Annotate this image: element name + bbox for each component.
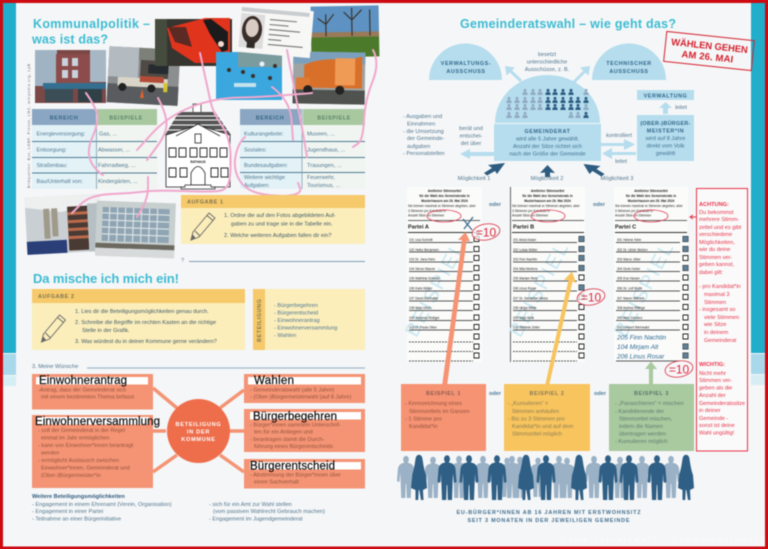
table: right areas: BEREICH bbox=[256, 116, 284, 122]
box: Einwohnerversammlung: - kann von Einwohner*innen beantragt bbox=[38, 443, 134, 449]
box: Beispiel 2: Kandidat*in und auf dem bbox=[512, 424, 574, 430]
badge: =10 ballot 1: =10 bbox=[476, 226, 497, 240]
table: right areas: Kulturangebote: bbox=[244, 132, 284, 138]
table: left areas: Fahrradweg, ... bbox=[98, 163, 136, 169]
panel: Achtung warning: - insgesamt so bbox=[699, 307, 735, 313]
box: Ober-Bürgermeister: direkt vom Volk bbox=[647, 144, 685, 150]
label: tasks list: aufgaben bbox=[407, 144, 430, 150]
semicircle: Technischer Ausschuss: AUSSCHUSS bbox=[609, 69, 649, 75]
box: Bürgerbegehren bbox=[244, 409, 365, 452]
box: Beispiel 1 bbox=[401, 384, 486, 451]
ballot: Partei C: 307 Maren Wilhelm bbox=[617, 296, 645, 300]
panel: Beteiligung term list: - Bürgerentscheid bbox=[274, 310, 318, 316]
text: Aufgabe 1 instructions: 1. Ordne die auf den Fotos abgebildeten Auf- bbox=[224, 213, 336, 219]
ballot: Partei C: 206 Linus Rosar bbox=[616, 354, 665, 360]
ballot: Partei B: Amtlicher Stimmzettel bbox=[531, 189, 564, 193]
text: further participation options: - Teilnahme an einer Bürgerinitiative bbox=[32, 516, 121, 522]
panel: Achtung warning: Stimmen ver- bbox=[699, 255, 732, 261]
box: Verwaltung: VERWALTUNG bbox=[644, 94, 687, 100]
panel: Achtung warning bbox=[696, 188, 748, 451]
panel: Beteiligung term list: BETEILIGUNG bbox=[257, 299, 263, 342]
label: tasks list bbox=[403, 114, 445, 157]
ballot: Partei A: 109 Johanna Rüdiger bbox=[409, 316, 440, 320]
ballot: Partei B bbox=[505, 187, 585, 362]
ballot: Partei B: Musterhausen am 26. Mai 2024 bbox=[524, 199, 571, 203]
box: Einwohnerversammlung: - ermöglicht Austausch zwischen bbox=[38, 458, 119, 464]
pink connector lines bbox=[72, 50, 376, 217]
ballot: Partei C: BEISPIEL bbox=[610, 238, 679, 341]
labels: Möglichkeit bbox=[458, 176, 633, 182]
red circles: ballot sitze bbox=[427, 210, 668, 222]
arrow: to tasks bbox=[460, 149, 494, 159]
label: committees bbox=[525, 52, 570, 73]
box: Einwohnerantrag bbox=[32, 374, 153, 410]
panel: Aufgabe 2 bbox=[32, 289, 245, 350]
box: Beispiel 1: BEISPIEL 1 bbox=[426, 391, 461, 397]
box: Beispiel 2 bbox=[504, 384, 590, 451]
box: Bürgerbegehren: Bürgerbegehren bbox=[253, 411, 337, 423]
ballot: Partei A: Partei A bbox=[408, 224, 429, 230]
semicircle: Technischer Ausschuss bbox=[592, 44, 666, 80]
panel: Achtung warning: dabei gilt: bbox=[699, 270, 723, 276]
box: Ober-Bürgermeister: gewählt bbox=[656, 151, 676, 157]
box: Bürgerbegehren: - Bürger*innen sammeln Unterschrif- bbox=[250, 422, 341, 428]
text: further participation options: Weitere Beteiligungsmöglichkeiten bbox=[32, 494, 125, 500]
ballot: Partei C: 308 Andrea Rittinge bbox=[617, 306, 645, 310]
label: tasks list: - Personalstellen bbox=[403, 151, 445, 157]
label: committees: unterschiedliche bbox=[527, 60, 567, 66]
center circle: Beteiligung in der Kommune: IN DER bbox=[187, 430, 210, 436]
ballot: Partei A: Musterhausen am 26. Mai 2024 bbox=[421, 199, 468, 203]
badge: =10 ballot 1 bbox=[471, 222, 501, 242]
table: right areas: Weitere wichtige bbox=[244, 175, 285, 181]
box: Bürgerbegehren: führung eines Bürgerentscheids bbox=[254, 444, 333, 450]
panel: Achtung warning: ACHTUNG: bbox=[699, 202, 729, 208]
panel: Achtung warning: in deinem bbox=[704, 330, 729, 336]
table: left areas: BEREICH bbox=[50, 116, 78, 122]
ballot: Partei A: Anzahl Sitze: xx Stimmen bbox=[408, 214, 444, 218]
box: Bürgerbegehren: ten für ein Anliegen und bbox=[254, 430, 313, 436]
ballot: Partei A: 103 Dr. Jana Klein bbox=[409, 258, 435, 262]
box: Wahlen: - (Ober-)Bürgermeisterwahl (auf 8 Jahre) bbox=[250, 394, 351, 400]
arrow: leitet bbox=[602, 148, 636, 159]
text: Aufgabe 1 instructions: 2. Welche weiteren Aufgaben fallen dir ein? bbox=[224, 233, 332, 239]
panel: Achtung warning: zettel und es gibt bbox=[699, 225, 742, 231]
stamp: Wählen gehen: WÄHLEN GEHEN bbox=[671, 37, 748, 56]
box: Gemeinderat bbox=[494, 124, 601, 161]
box: Beispiel 1: - Kennzeichnung eines bbox=[405, 401, 462, 407]
photo: swimming pool bbox=[216, 52, 282, 100]
caption: voters: SEIT 3 MONATEN IN DER JEWEILIGEN GEMEINDE bbox=[468, 518, 630, 524]
box: Ober-Bürgermeister: MEISTER*IN bbox=[647, 128, 684, 134]
ballot: Partei C: Musterhausen am 26. Mai 2024 bbox=[628, 199, 675, 203]
box: Einwohnerantrag: Einwohnerantrag bbox=[39, 375, 127, 387]
ballot: Partei C: Anzahl Sitze: xx Stimmen bbox=[615, 214, 651, 218]
table: left areas: Abwasser, ... bbox=[98, 148, 130, 154]
title: Kommunalpolitik: Kommunalpolitik – bbox=[33, 17, 150, 31]
panel: Achtung warning: wie Sitze bbox=[703, 322, 726, 328]
center circle: Beteiligung in der Kommune: BETEILIGUNG bbox=[176, 422, 221, 428]
label: berät und entscheidet: entschei- bbox=[460, 134, 482, 140]
text: Aufgabe 2 instructions: Stelle in der Grafik. bbox=[82, 328, 130, 334]
ballot: Partei C: 305 Eva Hauser bbox=[617, 276, 641, 280]
box: Ober-Bürgermeister bbox=[637, 115, 694, 161]
box: Bürgerentscheid: einen Sachverhalt bbox=[254, 480, 299, 486]
table: left areas: Energieversorgung: bbox=[36, 132, 86, 138]
ballot: Partei C: Partei C bbox=[615, 224, 636, 230]
semicircle: Technischer Ausschuss: TECHNISCHER bbox=[606, 61, 652, 67]
text: further participation options: - Engagement in einer Partei bbox=[32, 509, 103, 515]
ballot: Partei A: 105 Mathilda Schwab bbox=[409, 276, 440, 280]
table: left areas: Kindergärten, ... bbox=[98, 179, 138, 185]
table: left areas: BEISPIELE bbox=[109, 116, 143, 122]
center circle: Beteiligung in der Kommune bbox=[167, 399, 230, 463]
semicircle: Verwaltungsausschuss: AUSSCHUSS bbox=[446, 69, 486, 75]
ballot: Partei B: 205 Mariam Reid bbox=[513, 276, 537, 280]
box: Einwohnerversammlung: - soll der Gemeinderat in der Regel bbox=[38, 428, 125, 434]
box: Einwohnerantrag: -Antrag, dass der Gemeinderat sich bbox=[38, 388, 126, 394]
ballot: Partei B: 207 Dr. Sebastian Weiss bbox=[513, 296, 548, 300]
labels: Möglichkeit: Möglichkeit 2 bbox=[531, 176, 563, 182]
ballot: Partei A: für die Wahl des Gemeinderats in bbox=[419, 194, 470, 198]
ballot: Partei C: Amtlicher Stimmzettel bbox=[634, 189, 668, 193]
photo: road works truck bbox=[107, 46, 180, 106]
label: oder: oder bbox=[489, 391, 502, 397]
label: committees: besetzt bbox=[538, 52, 556, 58]
label: tasks list: Einnahmen bbox=[407, 122, 435, 128]
box: Beispiel 3: übertragen werden bbox=[619, 432, 666, 438]
label: berät und entscheidet: berät und bbox=[459, 126, 483, 132]
stamp: Wählen gehen: AM 26. MAI bbox=[681, 49, 734, 66]
icon: pencil bbox=[42, 315, 66, 342]
right side tab bbox=[751, 3, 765, 385]
caption: voters bbox=[456, 509, 641, 524]
arrow: example 2 bbox=[545, 272, 576, 386]
panel: Achtung warning: Du bekommst bbox=[699, 210, 734, 216]
box: Bürgerentscheid: Bürgerentscheid bbox=[250, 460, 335, 472]
ballot: Partei B: 208 Helga Wilde bbox=[513, 306, 537, 310]
box: Beispiel 1: Kandidat*in bbox=[409, 424, 438, 430]
photo: locker wall bbox=[95, 201, 176, 258]
ballot: Partei C: 301 Helene Klein bbox=[617, 238, 642, 242]
ballot: Partei C: 3 Stimmen pro Kandidat*in bbox=[615, 209, 653, 213]
panel: Achtung warning: - pro Kandidat*in bbox=[699, 284, 741, 290]
text: Aufgabe 2 instructions bbox=[75, 309, 217, 345]
box: Beispiel 3: Stimmzettel mischen, bbox=[619, 416, 673, 422]
panel: Achtung warning: maximal 3 bbox=[704, 292, 730, 298]
box: Gemeinderat: wird alle 5 Jahre gewählt. bbox=[515, 136, 580, 142]
table: right areas bbox=[240, 109, 365, 189]
arrow: example 3 bbox=[645, 362, 657, 386]
panel: Beteiligung term list: - Bürgerbegehren bbox=[274, 303, 318, 309]
stamp: Wählen gehen bbox=[664, 31, 754, 71]
photo credit: Bildquellen: Bus, LGBP, Presse, LMZ, wikipedia.org, LpB bbox=[27, 63, 31, 188]
ballot: Partei C: 302 Dr. Ulrich Nießen bbox=[617, 248, 648, 252]
arrow: warning pointer bbox=[690, 215, 696, 219]
ballot: Partei C: 303 Marco Jöller bbox=[617, 258, 642, 262]
table: left areas: Bau/Unterhalt von: bbox=[36, 179, 83, 185]
badge: =10 ballot 2 bbox=[576, 287, 606, 307]
text: further participation options: - Engagement im Jugendgemeinderat bbox=[209, 516, 303, 522]
panel: Aufgabe 1 bbox=[181, 195, 365, 244]
ballot: Partei B: 3 Stimmen pro Kandidat*in bbox=[512, 209, 550, 213]
panel: Achtung warning: Stimmen ver- bbox=[699, 378, 732, 384]
text: further participation options: (vom passiven Wahlrecht Gebrauch machen) bbox=[213, 509, 325, 515]
box: Gemeinderat: Anzahl der Sitze richtet sich bbox=[513, 144, 582, 150]
table: right areas: Trauungen, ... bbox=[307, 163, 342, 169]
panel: Achtung warning: verschiedene bbox=[699, 232, 732, 238]
photo: red bus bbox=[155, 18, 232, 66]
photo: library bbox=[25, 194, 102, 255]
photo: identity card bbox=[236, 5, 314, 58]
ballot: Partei C: 104 Mirjam Alt bbox=[617, 344, 659, 351]
table: right areas: Museen, ... bbox=[307, 132, 335, 138]
panel: Achtung warning: geben kannst, bbox=[699, 262, 735, 268]
ballot: Partei B: 203 Finn Nachtin bbox=[513, 258, 537, 262]
panel: Achtung warning: viele Stimmen bbox=[704, 315, 739, 321]
photo: garbage truck bbox=[293, 51, 365, 105]
panel: Achtung warning: Gemeinderat bbox=[704, 338, 737, 344]
label: committees: Ausschüsse, z. B. bbox=[525, 67, 570, 73]
box: Einwohnerversammlung: (Ober-)Bürgermeister*in bbox=[41, 473, 101, 479]
box: Einwohnerantrag: mit einem bestimmten Thema befasst bbox=[41, 394, 135, 400]
label: tasks list: - die Umsetzung bbox=[403, 129, 444, 135]
panel: Achtung warning: in deiner bbox=[699, 408, 721, 414]
semicircle: Verwaltungsausschuss: VERWALTUNGS- bbox=[441, 61, 491, 67]
label: berät und entscheidet: det über bbox=[461, 141, 481, 147]
box: Bürgerbegehren: - beantragen damit die Durch- bbox=[250, 437, 324, 443]
ballot: Partei A: 3 Stimmen pro Kandidat*in bbox=[408, 209, 446, 213]
ballot: Partei C: 306 Dr. Leif Wolfe bbox=[617, 286, 643, 290]
ballot: Partei B: für die Wahl des Gemeinderats in bbox=[522, 194, 573, 198]
ballot: Partei A: 107 David Eichhaller bbox=[409, 296, 439, 300]
title: Kommunalpolitik bbox=[31, 17, 150, 46]
heading: Da mische ich mich ein: Da mische ich mich ein! bbox=[33, 271, 179, 286]
arrow: to Technischer Ausschuss bbox=[574, 66, 590, 82]
panel: Achtung warning: Wahl ungültig! bbox=[699, 430, 735, 436]
panel: Achtung warning: sonst ist deine bbox=[699, 423, 735, 429]
ballot: Partei A: Amtlicher Stimmzettel bbox=[428, 189, 461, 193]
box: Beispiel 1: Stimmzettels im Ganzen bbox=[409, 409, 470, 415]
caption: voters: EU-BÜRGER*INNEN AB 16 JAHREN MIT ERSTWOHNSITZ bbox=[456, 509, 641, 516]
icon: town hall bbox=[165, 104, 231, 189]
badge: =10 ballot 3 bbox=[664, 359, 694, 379]
photo: park bbox=[311, 5, 379, 58]
table: right areas: Tourismus, ... bbox=[307, 183, 341, 189]
label: leitet: leitet bbox=[615, 159, 627, 165]
ballot: Partei C: 205 Finn Nachtin bbox=[616, 334, 667, 342]
table: left areas: Straßenbau: bbox=[36, 163, 68, 169]
box: Einwohnerversammlung: Einwohnerversammlung bbox=[35, 416, 160, 428]
arrow: up to Verwaltung bbox=[659, 102, 672, 114]
box: Bürgerentscheid bbox=[244, 459, 365, 488]
text: Aufgabe 1 instructions: gaben zu und trage sie in die Tabelle ein. bbox=[231, 222, 333, 228]
labels: oder between ballots: oder bbox=[489, 202, 502, 208]
box: Beispiel 1: - 1 Stimme pro bbox=[405, 416, 442, 422]
box: Einwohnerversammlung: einmal im Jahr ermöglichen bbox=[41, 436, 109, 442]
ballot: Partei C: 310 Lennert Wernwald bbox=[617, 326, 649, 330]
table: right areas: Soziales: bbox=[244, 148, 267, 154]
box: Beispiel 3: - „Panaschieren“ = mischen bbox=[615, 401, 684, 407]
left side tab bbox=[3, 3, 16, 386]
panel: Achtung warning: Möglichkeiten, bbox=[699, 240, 735, 246]
text: Aufgabe 2 instructions: 1. Lies dir die Beteiligungsmöglichkeiten genau durch. bbox=[75, 309, 209, 315]
label: berät und entscheidet bbox=[459, 126, 483, 147]
table: left areas bbox=[32, 109, 157, 189]
footer watermark: Gemeinderatswahl - Gemeindeordnung bbox=[560, 535, 765, 544]
box: Wahlen: Wahlen bbox=[254, 375, 294, 387]
labels: Möglichkeit: Möglichkeit 1 bbox=[458, 176, 490, 182]
ballot: Partei A: 104 Simon Maurer bbox=[409, 267, 436, 271]
box: Ober-Bürgermeister: (OBER-)BÜRGER- bbox=[640, 120, 691, 127]
panel: Beteiligung term list bbox=[253, 289, 365, 350]
panel: Achtung warning: geben als die bbox=[699, 386, 732, 392]
ballot: Partei B: 204 Mila Mertens bbox=[513, 267, 538, 271]
ballot: Partei B: Partei B bbox=[513, 224, 534, 230]
panel: Achtung warning: Gemeinde - bbox=[699, 416, 728, 422]
label: kontrolliert: kontrolliert bbox=[606, 133, 632, 139]
ballot: Partei B: 210 Stefanie Zeller bbox=[513, 326, 541, 330]
panel: Beteiligung term list: - Wahlen bbox=[274, 333, 296, 339]
icon: town hall: RATHAUS bbox=[190, 160, 206, 164]
panel: Beteiligung term list: - Einwohnerversammlung bbox=[274, 326, 337, 332]
ballot: Partei A: 101 Lisa Schmitt bbox=[409, 238, 433, 242]
arrows: voting options bbox=[484, 163, 604, 177]
connectors to center circle bbox=[150, 388, 244, 472]
box: Beispiel 3: - Kumulieren möglich bbox=[615, 439, 668, 445]
text: Aufgabe 2 instructions: 2. Schreibe die Begriffe im rechten Kasten an die richtige bbox=[75, 320, 216, 326]
label: leitet: leitet bbox=[675, 105, 687, 111]
ballot: Partei B: Sie können maximal xx Stimmen abgeben, aber bbox=[512, 204, 581, 208]
panel: Achtung warning: Stimmen bbox=[704, 300, 726, 306]
seats: party colours bbox=[506, 89, 589, 118]
ballot: Partei C: 304 Doris Huber bbox=[617, 267, 641, 271]
arrow: kontrolliert bbox=[601, 139, 635, 150]
council dome with seats bbox=[495, 75, 600, 123]
ballot: Partei B: Anzahl Sitze: xx Stimmen bbox=[512, 214, 548, 218]
ballot: Partei C: 309 Alex Günderz bbox=[617, 316, 643, 320]
title: Gemeinderatswahl: Gemeinderatswahl – wie geht das? bbox=[460, 17, 676, 31]
panel: Achtung warning: Anzahl der bbox=[699, 393, 726, 399]
badge: =10 ballot 3: =10 bbox=[669, 362, 690, 376]
labels: oder between ballots bbox=[489, 202, 606, 208]
text: further participation options: - sich für ein Amt zur Wahl stellen bbox=[209, 502, 292, 508]
text: Aufgabe 1 instructions bbox=[224, 213, 336, 239]
ballot: Partei B: 209 Maja Wolk bbox=[513, 316, 534, 320]
table: right areas: Jugendhaus, ... bbox=[307, 148, 346, 154]
table: right areas: Bundesaufgaben: bbox=[244, 163, 288, 169]
box: Beispiel 3: BEISPIEL 3 bbox=[634, 391, 669, 397]
ballot: Partei A bbox=[401, 187, 482, 362]
panel: Achtung warning: Gemeinderatssitze bbox=[699, 401, 745, 407]
box: Ober-Bürgermeister: wird auf 8 Jahre bbox=[645, 136, 685, 142]
ballot: Partei A: 102 Heiko Bergmann bbox=[409, 248, 439, 252]
ballot: Partei A: 110 Dr. Paula Otten bbox=[409, 326, 437, 330]
box: Bürgerentscheid: - Abstimmung der Bürger*innen über bbox=[250, 472, 341, 478]
line: Meine Wünsche: 3. Meine Wünsche bbox=[32, 364, 78, 370]
box: Gemeinderat: GEMEINDERAT bbox=[524, 129, 571, 135]
photo: bank building bbox=[35, 50, 106, 103]
panel: Achtung warning: wie du deine bbox=[698, 247, 730, 253]
ballot: Partei B: 202 Lukas Müller bbox=[513, 248, 538, 252]
crowd of citizens bbox=[397, 455, 694, 500]
box: Beispiel 2: Stimmen anhäufen bbox=[512, 409, 559, 415]
box: Wahlen bbox=[244, 374, 365, 403]
table: right areas: Aufgaben: bbox=[244, 183, 270, 189]
box: Beispiel 3: indem die Namen bbox=[619, 424, 663, 430]
box: Beispiel 3 bbox=[609, 384, 694, 451]
label: tasks list: der Gemeinde- bbox=[407, 136, 444, 142]
table: right areas: BEISPIELE bbox=[317, 116, 351, 122]
box: Beispiel 2: - Bis zu 3 Stimmen pro bbox=[508, 416, 565, 422]
box: Gemeinderat: nach der Größe der Gemeinde bbox=[509, 152, 586, 158]
box: Wahlen: - Gemeinderatswahl (alle 5 Jahre) bbox=[250, 388, 334, 394]
panel: Achtung warning: WICHTIG: bbox=[699, 362, 725, 368]
text: Aufgabe 2 instructions: 3. Was würdest du in deiner Kommune gerne verändern? bbox=[75, 339, 217, 345]
ballot: Partei B: BEISPIEL bbox=[505, 238, 574, 341]
panel: Aufgabe 2: AUFGABE 2 bbox=[38, 294, 75, 300]
table: left areas: Gas, ... bbox=[99, 132, 117, 138]
box: Beispiel 2: - „Kumulieren“ = bbox=[508, 401, 548, 407]
badge: =10 ballot 2: =10 bbox=[581, 290, 602, 304]
ballot: Partei A: 106 Karin Müller bbox=[409, 286, 433, 290]
ballot: Partei C: Sie können maximal xx Stimmen abgeben, aber bbox=[615, 204, 684, 208]
box: Einwohnerversammlung: werden bbox=[40, 450, 59, 456]
ballot: Partei C bbox=[610, 187, 688, 362]
box: Einwohnerversammlung bbox=[32, 415, 160, 488]
label: oder: oder bbox=[594, 391, 607, 397]
panel: Achtung warning: Nicht mehr bbox=[699, 371, 726, 377]
box: Beispiel 2: BEISPIEL 2 bbox=[530, 391, 564, 397]
panel: Achtung warning: mehrere Stimm- bbox=[699, 217, 739, 223]
panel: Aufgabe 1: AUFGABE 1 bbox=[187, 200, 224, 206]
answer line: ? bbox=[181, 258, 184, 264]
table: right areas: Feuerwehr, bbox=[307, 175, 335, 181]
ballot: Partei A: 108 Maja Ulrich bbox=[409, 306, 431, 310]
box: Verwaltung bbox=[637, 90, 694, 100]
table: left areas: Entsorgung: bbox=[36, 148, 67, 154]
ballot: Partei B: 201 Abdul Adam bbox=[513, 238, 537, 242]
ballot: Partei A: BEISPIEL bbox=[401, 238, 470, 341]
text: further participation options bbox=[32, 494, 325, 522]
icon: pencil bbox=[191, 213, 215, 240]
ballot: Partei A: Sie können maximal xx Stimmen abgeben, aber bbox=[408, 204, 477, 208]
arrow: example 1 bbox=[442, 232, 470, 386]
labels: Möglichkeit: Möglichkeit 3 bbox=[601, 176, 633, 182]
box: Beispiel 3: - Kandidierende der bbox=[615, 409, 664, 415]
arrow: to Verwaltungsausschuss bbox=[505, 66, 521, 81]
text: further participation options: - Engagement in einem Ehrenamt (Verein, Organisation) bbox=[32, 502, 172, 508]
label: tasks list: - Ausgaben und bbox=[403, 114, 442, 120]
ballot: Partei B: 206 Linus Rosar bbox=[513, 286, 537, 290]
box: Einwohnerversammlung: Einwohner*innen, Gemeinderat und bbox=[41, 466, 130, 472]
semicircle: Verwaltungsausschuss bbox=[429, 44, 502, 80]
box: Beispiel 2: Stimmzettel möglich bbox=[512, 432, 562, 438]
ballot: Partei C: für die Wahl des Gemeinderats in bbox=[626, 194, 676, 198]
panel: Beteiligung term list: - Einwohnerantrag bbox=[274, 318, 320, 324]
center circle: Beteiligung in der Kommune: KOMMUNE bbox=[181, 437, 216, 443]
title: Kommunalpolitik: was ist das? bbox=[31, 32, 108, 46]
labels: oder between ballots: oder bbox=[593, 202, 606, 208]
